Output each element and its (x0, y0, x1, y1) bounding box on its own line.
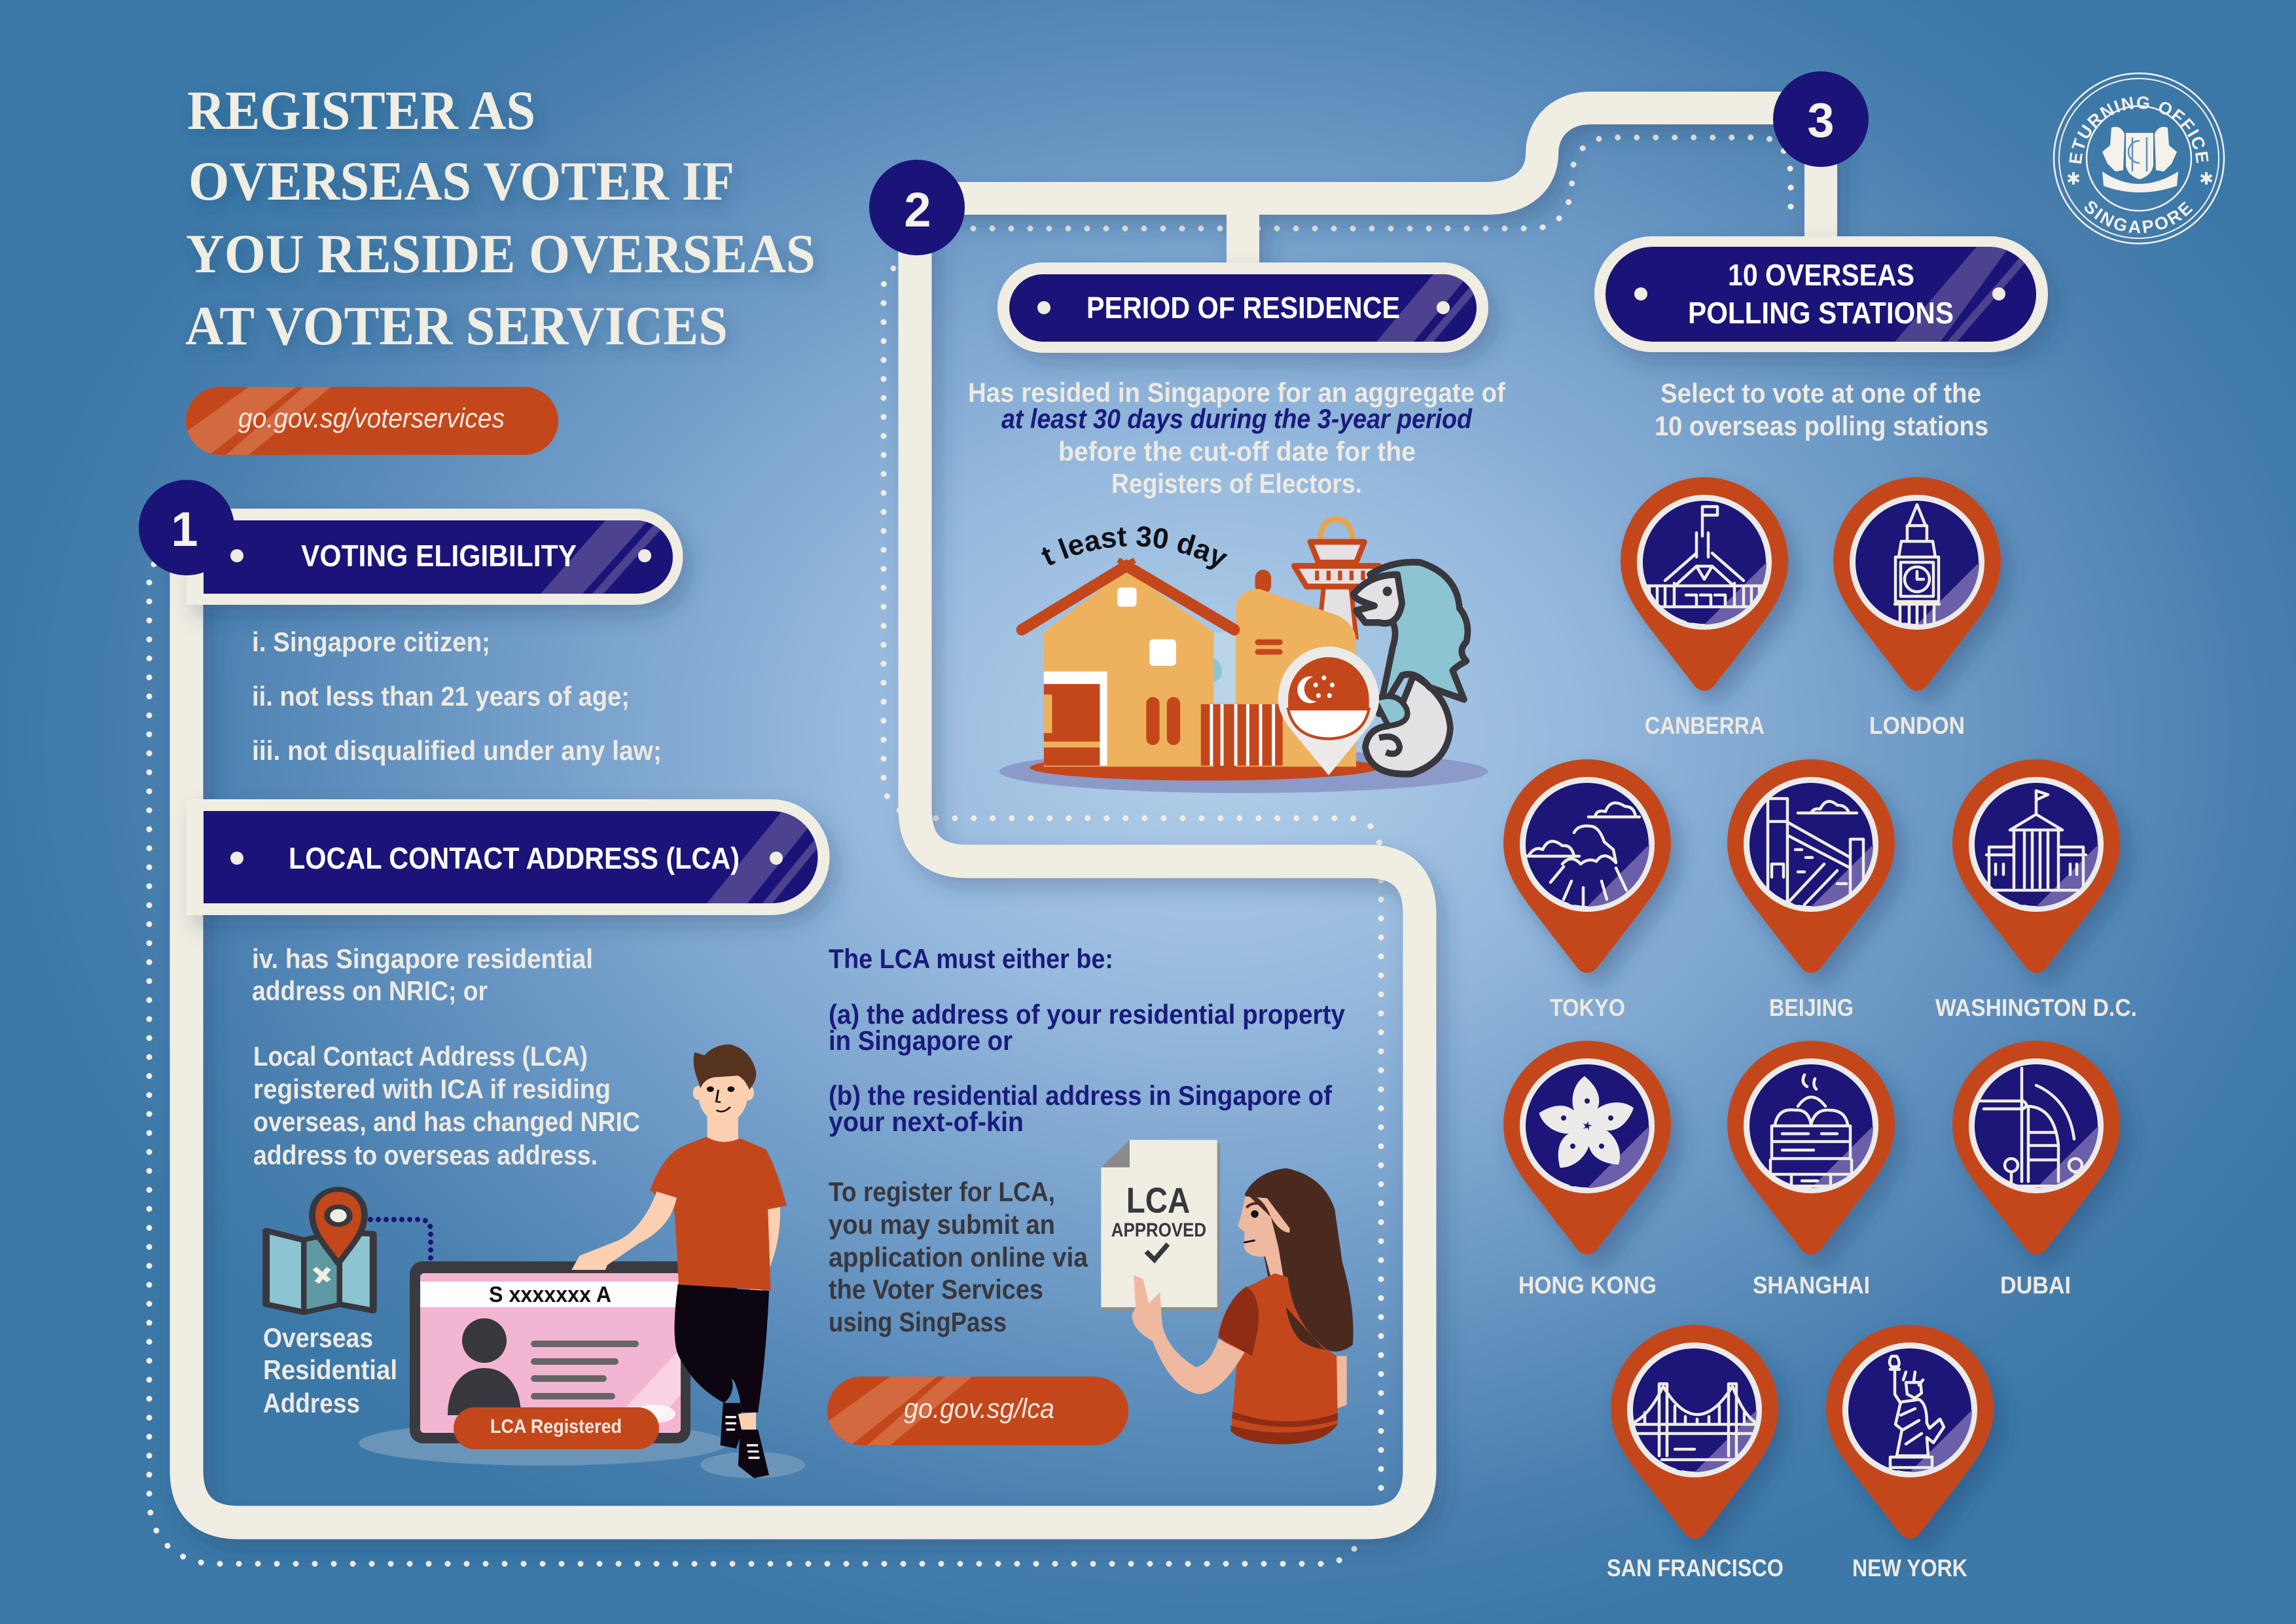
circled number 1: 1 (171, 502, 198, 556)
caption: overseas residential address: Address (263, 1388, 360, 1418)
pin: San Francisco (1611, 1325, 1778, 1538)
label: New York: NEW YORK (1852, 1555, 1967, 1581)
LCA requirements text: in Singapore or (829, 1025, 1013, 1056)
logo: Returning Officer Singapore seal (2053, 72, 2225, 245)
title: OVERSEAS VOTER IF (188, 151, 734, 212)
label: Dubai: DUBAI (2000, 1272, 2071, 1299)
pin: Shanghai (1727, 1041, 1895, 1254)
title: REGISTER AS (187, 80, 535, 141)
period of residence text: Registers of Electors. (1111, 468, 1362, 499)
label: Washington D.C.: WASHINGTON D.C. (1935, 994, 2137, 1021)
polling stations instruction (1655, 378, 1988, 441)
caption: overseas residential address: Residential (263, 1354, 397, 1385)
header: period of residence: PERIOD OF RESIDENCE (1086, 291, 1400, 325)
pin: Canberra (1621, 477, 1788, 691)
LCA link button (827, 1377, 1128, 1445)
dotted connector from map to card (370, 1219, 431, 1260)
label: Canberra: CANBERRA (1645, 712, 1765, 739)
LCA link button: go.gov.sg/lca (904, 1393, 1054, 1424)
LCA eligibility text: Local Contact Address (LCA) (253, 1041, 588, 1072)
icon: bauhinia flower (1535, 1076, 1638, 1175)
pin: New York (1826, 1325, 1994, 1538)
header: period of residence (997, 262, 1490, 353)
pin: Washington D.C. (1952, 759, 2120, 973)
pin: London (1833, 477, 2001, 691)
LCA eligibility text: iv. has Singapore residential (252, 943, 593, 974)
illustration ground shadows (359, 1421, 805, 1478)
road connecting steps 2 and 3 (916, 108, 1821, 268)
header: overseas polling stations: 10 OVERSEAS (1728, 258, 1914, 292)
LCA requirements text: (b) the residential address in Singapore of (829, 1080, 1333, 1111)
header: local contact address (187, 799, 848, 915)
label: London: LONDON (1869, 712, 1965, 739)
circled number 3: 3 (1807, 93, 1835, 147)
circled number 2: 2 (904, 183, 931, 237)
dotted trail: step 2 (884, 268, 1381, 1506)
LCA requirements text: The LCA must either be: (829, 943, 1113, 974)
header: local contact address: LOCAL CONTACT ADDRESS (LCA) (289, 841, 740, 875)
voter services link button: go.gov.sg/voterservices (238, 403, 505, 433)
LCA eligibility text (252, 943, 640, 1170)
caption: overseas residential address (263, 1322, 397, 1418)
icon: Golden Gate Bridge (1632, 1384, 1757, 1460)
logo: Returning Officer Singapore seal: SINGAPORE (2084, 201, 2193, 233)
LCA registration instructions: application online via (829, 1242, 1088, 1272)
icon: Statue of Liberty (1890, 1356, 1944, 1468)
pin: Tokyo (1503, 759, 1671, 973)
polling stations instruction: 10 overseas polling stations (1655, 410, 1988, 441)
title: AT VOTER SERVICES (185, 295, 728, 357)
road connecting steps 1 and 2 (187, 208, 1420, 1523)
LCA eligibility text: registered with ICA if residing (253, 1074, 611, 1104)
header: overseas polling stations (1594, 236, 2048, 352)
caption: overseas residential address: Overseas (263, 1322, 373, 1353)
icon: dumpling steamer (1770, 1075, 1852, 1186)
icon: map with location pin (266, 1189, 373, 1312)
logo: Returning Officer Singapore seal: ✱ (2066, 169, 2081, 189)
icon: Great Wall (1768, 799, 1863, 905)
illustration: LCA registered NRIC card: S xxxxxxx A (489, 1282, 611, 1307)
header: overseas polling stations: POLLING STATIONS (1688, 296, 1954, 330)
title: YOU RESIDE OVERSEAS (186, 223, 816, 285)
curved label: at least 30 days (1041, 526, 1228, 569)
illustration: Singapore home, tower and Merlion (999, 519, 1488, 793)
illustration: LCA registered NRIC card (410, 1261, 691, 1449)
icon: Parliament House (1642, 507, 1767, 607)
period of residence text: Has resided in Singapore for an aggregate of (968, 377, 1506, 408)
label: Tokyo: TOKYO (1550, 994, 1625, 1021)
LCA registration instructions: you may submit an (829, 1209, 1055, 1240)
illustration: woman pointing at LCA approved document: LCA (1126, 1180, 1190, 1220)
title (185, 80, 816, 357)
LCA eligibility text: address on NRIC; or (252, 975, 488, 1006)
icon: White House (1981, 791, 2091, 890)
eligibility criteria text: iii. not disqualified under any law; (252, 735, 662, 766)
label: Shanghai: SHANGHAI (1753, 1272, 1870, 1299)
LCA registration instructions: using SingPass (829, 1307, 1007, 1337)
eligibility criteria text: i. Singapore citizen; (252, 626, 490, 657)
dotted trail: step 1 (149, 564, 1355, 1564)
icon: Big Ben (1895, 505, 1939, 624)
LCA registration instructions (829, 1176, 1088, 1337)
header: voting eligibility: VOTING ELIGIBILITY (301, 539, 577, 573)
LCA eligibility text: address to overseas address. (253, 1140, 598, 1170)
label: San Francisco: SAN FRANCISCO (1607, 1555, 1784, 1581)
LCA requirements text: (a) the address of your residential property (829, 999, 1346, 1030)
LCA requirements text (829, 943, 1346, 1137)
pin: Beijing (1727, 759, 1895, 973)
illustration: woman pointing at LCA approved document: APPROVED (1111, 1219, 1206, 1241)
logo: Returning Officer Singapore seal: ✱ (2199, 169, 2214, 189)
illustration: LCA registered NRIC card: LCA Registered (490, 1416, 622, 1437)
LCA registration instructions: To register for LCA, (829, 1176, 1055, 1207)
dotted trail: step 3 (973, 137, 1791, 228)
LCA requirements text: your next-of-kin (829, 1106, 1024, 1137)
polling stations instruction: Select to vote at one of the (1660, 378, 1981, 408)
voter services link button (186, 387, 558, 455)
circled number 3 (1773, 71, 1869, 167)
eligibility criteria text (252, 626, 662, 766)
LCA registration instructions: the Voter Services (829, 1274, 1043, 1305)
illustration: woman pointing at LCA approved document (1101, 1140, 1354, 1444)
pin: Dubai (1952, 1041, 2120, 1254)
label: Hong Kong: HONG KONG (1518, 1272, 1657, 1299)
circled number 2 (869, 160, 965, 255)
period of residence text: at least 30 days during the 3-year period (1001, 403, 1473, 434)
header: voting eligibility (187, 509, 683, 605)
icon: Burj Al Arab (1974, 1068, 2098, 1186)
period of residence text (968, 377, 1506, 499)
eligibility criteria text: ii. not less than 21 years of age; (252, 681, 630, 712)
period of residence text: before the cut-off date for the (1058, 436, 1416, 467)
illustration: man leaning on card (571, 1044, 787, 1478)
LCA eligibility text: overseas, and has changed NRIC (253, 1106, 640, 1137)
pin: Hong Kong (1503, 1041, 1671, 1254)
label: Beijing: BEIJING (1769, 994, 1854, 1021)
icon: Mount Fuji (1526, 803, 1640, 907)
circled number 1 (139, 480, 234, 575)
